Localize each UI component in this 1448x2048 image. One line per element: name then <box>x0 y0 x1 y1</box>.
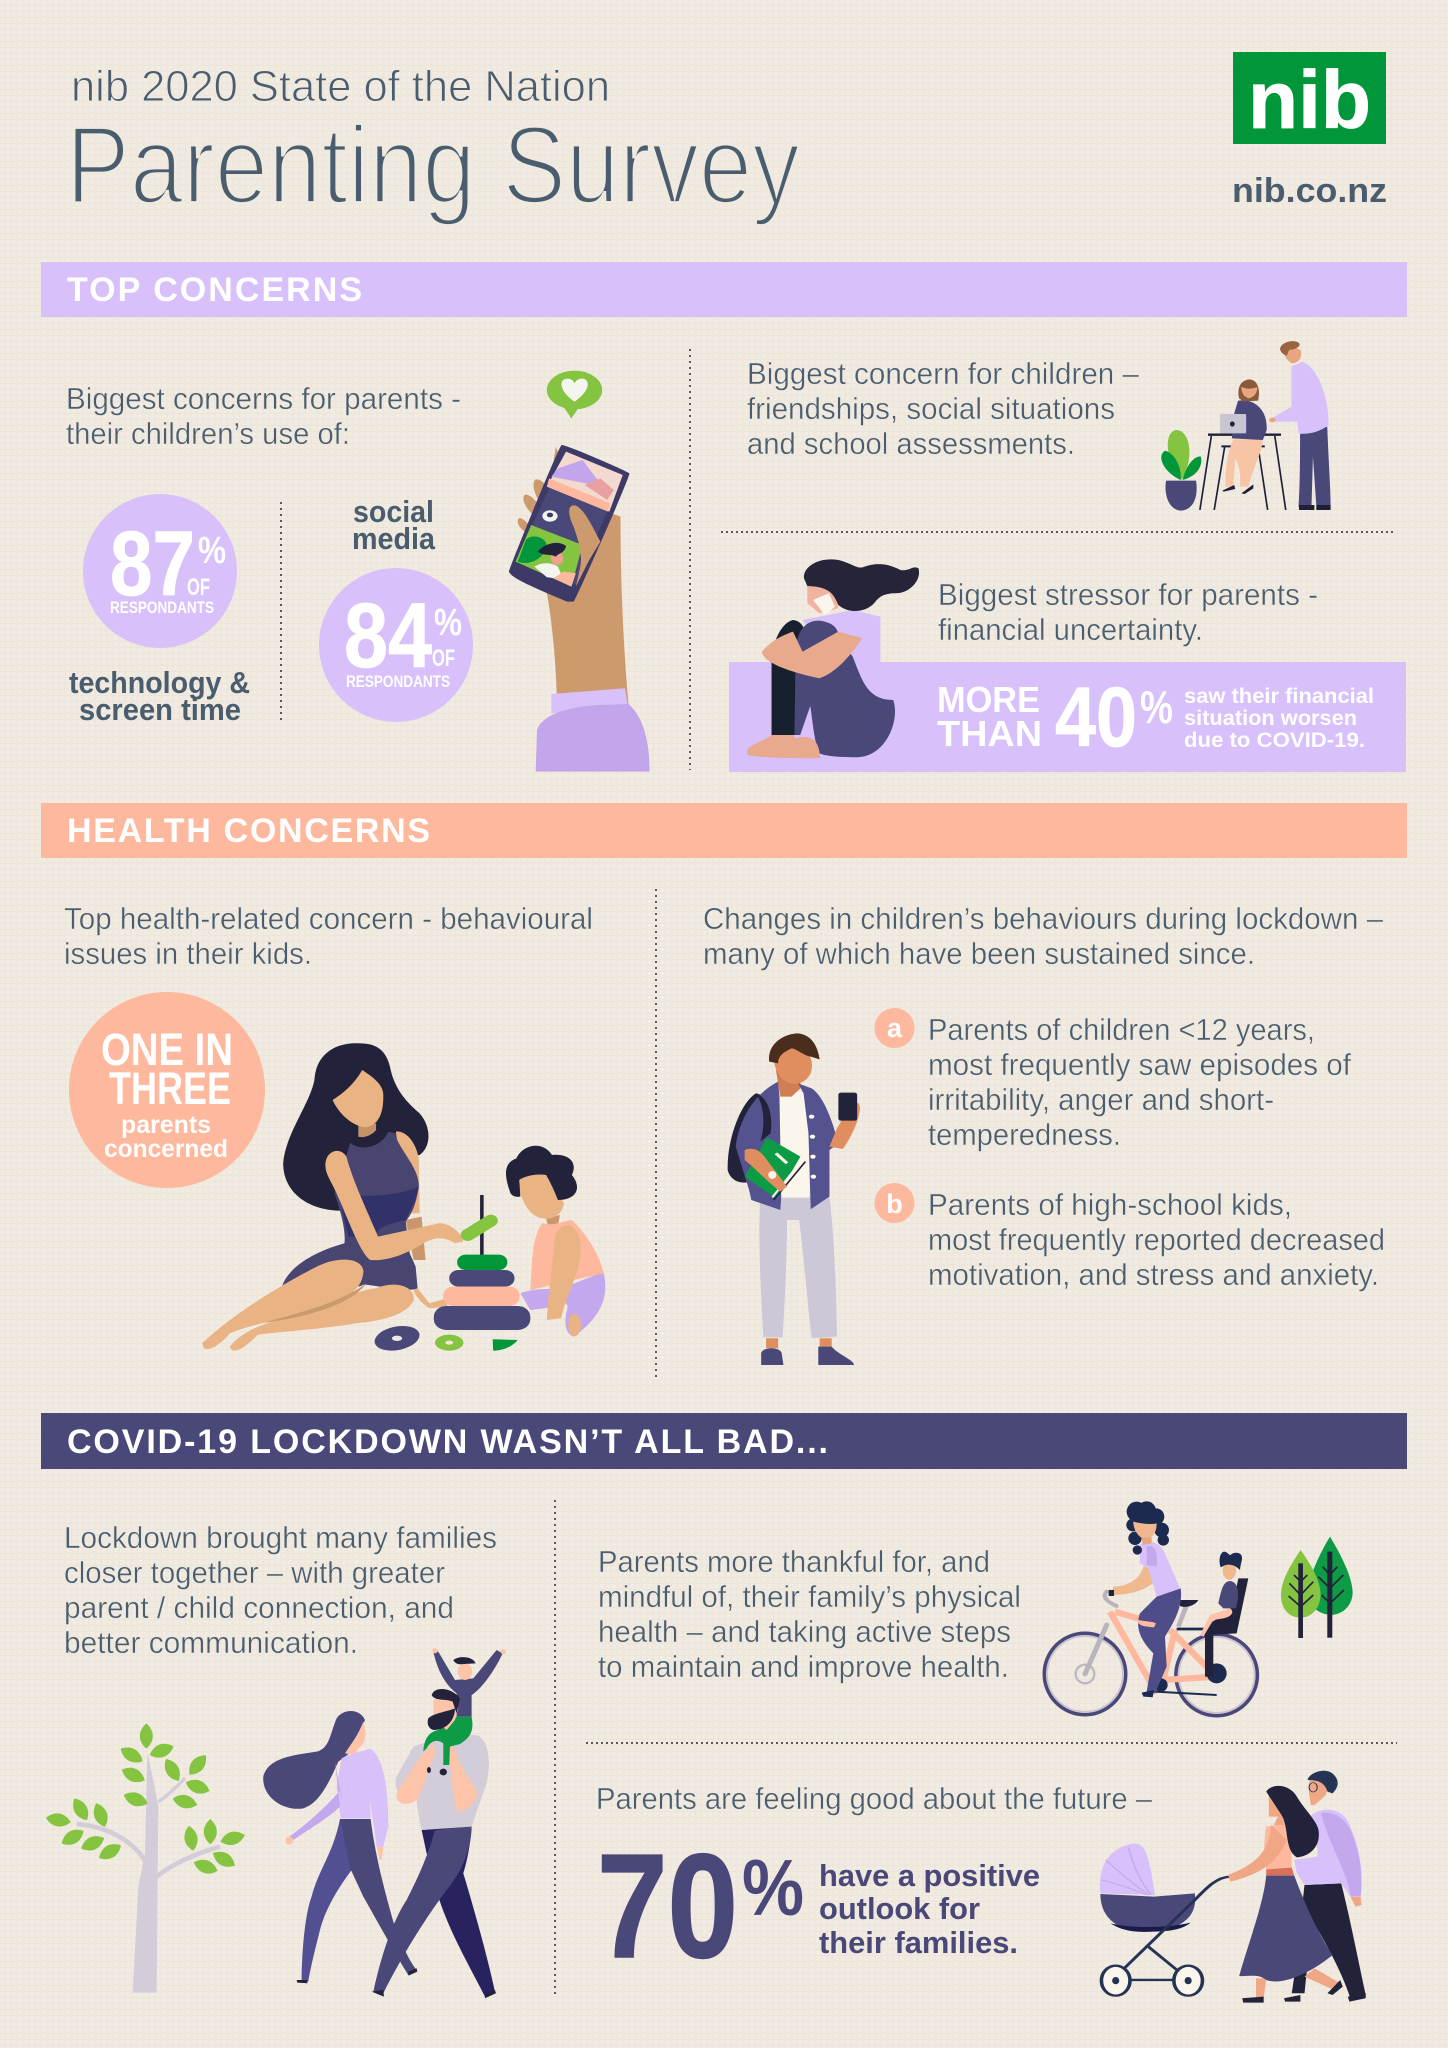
text: stressor: financial uncertainty. <box>938 612 1203 647</box>
illustration: couple with stroller <box>1100 1771 1366 2003</box>
website: nib.co.nz <box>1232 172 1387 210</box>
callout box: 40 percent <box>729 662 1406 772</box>
text: biggest concerns for parents: their children’s use of: <box>66 416 350 451</box>
callout box: 40 percent: MORE <box>937 679 1040 720</box>
panel: positive outlook <box>596 1771 1366 2003</box>
text: children concern: and school assessments. <box>747 426 1075 461</box>
icon: hand holding phone <box>509 371 650 772</box>
stat: 70 percent: their families. <box>819 1925 1018 1960</box>
stat: one in three: parents <box>121 1111 211 1139</box>
stat: 70 percent: % <box>742 1843 804 1932</box>
stat: 84 percent: OF <box>432 645 455 672</box>
section bar: health concerns <box>41 803 1407 858</box>
illustration: family walking <box>263 1648 506 1998</box>
panel: physical health <box>586 1501 1397 1743</box>
text: changes intro <box>703 901 1384 971</box>
section bar: health concerns: HEALTH CONCERNS <box>67 812 430 850</box>
stat: one in three <box>69 992 265 1188</box>
illustration: mother and child with stacking toy <box>202 1043 605 1355</box>
stat: one in three: THREE <box>109 1063 231 1114</box>
stat: 87 percent: RESPONDANTS <box>110 598 214 617</box>
label: social media: social <box>353 494 434 529</box>
callout box: 40 percent: % <box>1140 681 1173 733</box>
text: thankful for health: mindful of, their family’s physical <box>598 1579 1021 1614</box>
stat: 70 percent: outlook for <box>819 1891 980 1926</box>
callout box: 40 percent: situation worsen <box>1184 707 1357 730</box>
stat: 84 percent: RESPONDANTS <box>346 672 450 691</box>
point a <box>874 1008 1351 1152</box>
section bar: covid lockdown: COVID-19 LOCKDOWN WASN’T ALL BAD... <box>67 1423 828 1461</box>
text: stressor: Biggest stressor for parents - <box>938 577 1318 612</box>
text: changes intro: Changes in children’s behaviours during lockdown – <box>703 901 1384 936</box>
text: lockdown closeness: closer together – with greater <box>64 1555 445 1590</box>
stat: 87 percent: OF <box>187 574 210 601</box>
callout box: 40 percent: saw their financial <box>1184 685 1374 708</box>
text: children concern: friendships, social situations <box>747 391 1115 426</box>
callout box: 40 percent: THAN <box>937 713 1042 754</box>
panel: biggest concern for children <box>721 341 1396 532</box>
text: lockdown closeness <box>64 1520 497 1660</box>
text: health concern <box>64 901 593 971</box>
section bar: covid lockdown <box>41 1413 1407 1469</box>
section bar: top concerns: TOP CONCERNS <box>67 271 362 309</box>
point b: most frequently reported decreased <box>928 1222 1385 1257</box>
panel: parent concerns <box>66 371 650 772</box>
illustration: mother and child on bicycle <box>1044 1501 1257 1716</box>
text: changes intro: many of which have been sustained since. <box>703 936 1255 971</box>
point a: Parents of children <12 years, <box>928 1012 1315 1047</box>
label: social media: media <box>352 521 436 556</box>
stat: 87 percent: 87 <box>110 513 195 615</box>
stat: 70 percent: have a positive <box>819 1858 1040 1893</box>
point b <box>874 1183 1385 1292</box>
text: lockdown closeness: better communication. <box>64 1625 358 1660</box>
callout box: 40 percent: 40 <box>1055 670 1137 764</box>
illustration: worried woman sitting <box>747 559 919 758</box>
text: biggest concerns for parents <box>66 381 461 451</box>
label: technology and screen time: technology & <box>69 665 250 700</box>
text: thankful for health: health – and taking active steps <box>598 1614 1011 1649</box>
text: feeling good about future: Parents are feeling good about the future – <box>596 1781 1153 1816</box>
text: lockdown closeness: parent / child connection, and <box>64 1590 454 1625</box>
panel: behavioural issues <box>64 901 605 1355</box>
panel: family connection <box>45 1520 506 1998</box>
section bar: top concerns <box>41 262 1407 317</box>
illustration: student and teacher at desk <box>1161 341 1331 511</box>
text: children concern <box>747 356 1140 461</box>
text: thankful for health: to maintain and improve health. <box>598 1649 1009 1684</box>
text: thankful for health: Parents more thankful for, and <box>598 1544 990 1579</box>
header title block <box>66 62 800 227</box>
text: children concern: Biggest concern for children – <box>747 356 1140 391</box>
point b: b <box>886 1189 903 1219</box>
stat: one in three: concerned <box>104 1135 228 1163</box>
label: technology and screen time <box>69 665 250 727</box>
label: technology and screen time: screen time <box>79 692 241 727</box>
stat: 87 percent: % <box>198 530 226 572</box>
text: thankful for health <box>598 1544 1021 1684</box>
illustration: student with phone and book <box>728 1033 860 1365</box>
illustration: trees <box>1281 1537 1353 1638</box>
callout box: 40 percent: due to COVID-19. <box>1184 729 1365 752</box>
stat: one in three: ONE IN <box>101 1024 233 1075</box>
text: lockdown closeness: Lockdown brought many families <box>64 1520 497 1555</box>
nib logo: nib <box>1248 55 1371 146</box>
title: Parenting Survey <box>66 104 800 227</box>
label: social media <box>352 494 436 556</box>
stat: 87 percent <box>83 494 237 648</box>
point a: irritability, anger and short- <box>928 1082 1274 1117</box>
text: stressor <box>938 577 1318 647</box>
illustration: tree <box>45 1723 247 1993</box>
text: biggest concerns for parents: Biggest concerns for parents - <box>66 381 461 416</box>
stat: 70 percent <box>597 1824 1040 1989</box>
stat: 84 percent: % <box>434 602 462 644</box>
point b: motivation, and stress and anxiety. <box>928 1257 1379 1292</box>
stat: 84 percent: 84 <box>344 585 432 687</box>
stat: 70 percent: 70 <box>597 1824 738 1989</box>
point b: Parents of high-school kids, <box>928 1187 1292 1222</box>
stat: 84 percent <box>319 568 473 722</box>
panel: behaviour changes during lockdown <box>703 901 1385 1365</box>
point a: temperedness. <box>928 1117 1121 1152</box>
panel: biggest stressor <box>729 559 1406 772</box>
point a: a <box>887 1013 903 1043</box>
text: health concern: issues in their kids. <box>64 936 312 971</box>
subtitle: nib 2020 State of the Nation <box>71 62 610 111</box>
point a: most frequently saw episodes of <box>928 1047 1351 1082</box>
text: health concern: Top health-related concern - behavioural <box>64 901 593 936</box>
